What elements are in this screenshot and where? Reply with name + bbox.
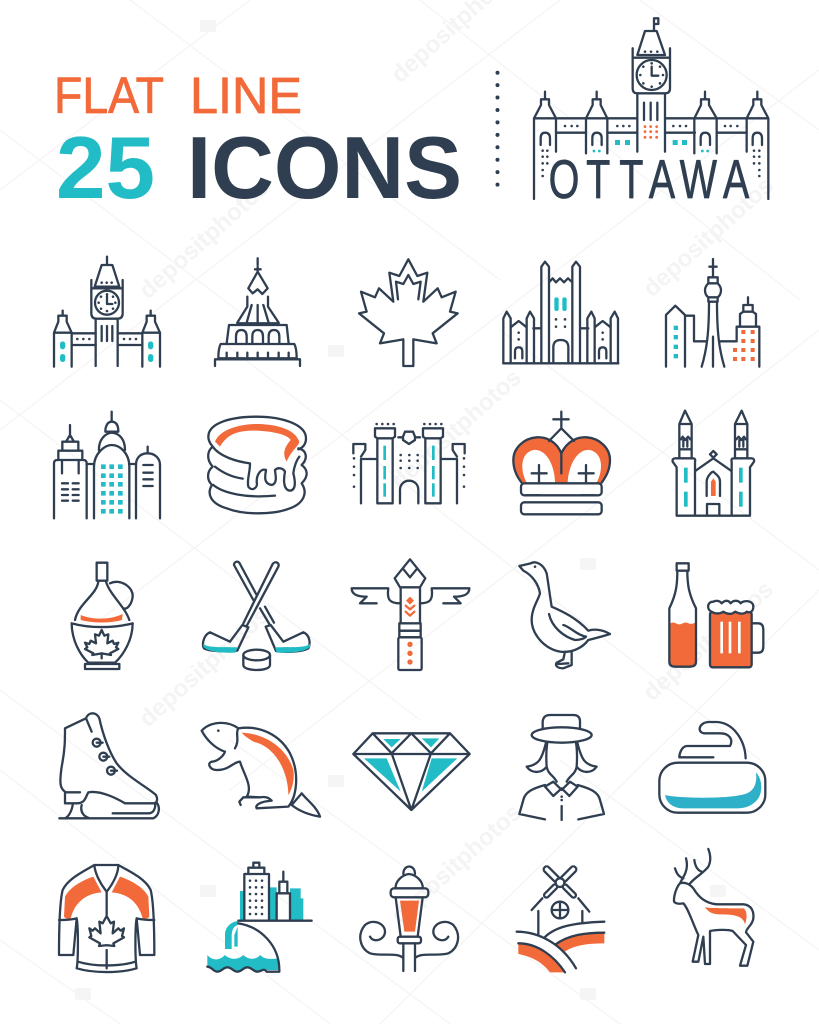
title: 25: 25 (56, 118, 155, 217)
icon: city skyline with dome (54, 412, 160, 518)
icon: royal crown (513, 412, 610, 514)
icon: waterfall and city (207, 863, 312, 972)
icon: CN tower skyline (666, 259, 759, 367)
icon: goose (519, 562, 610, 668)
watermark background: depositphotos (386, 799, 527, 929)
icon: Ottawa parliament header illustration (534, 18, 768, 211)
icon: dome building (215, 258, 300, 366)
watermark background: depositphotos (638, 576, 779, 706)
OTTAWA label: OTTAWA (549, 150, 749, 211)
watermark background: depositphotos (134, 602, 275, 732)
title: FLAT LINE: FLAT (54, 67, 164, 124)
icon: maple syrup jug (72, 563, 133, 669)
icon: diamond (353, 733, 470, 810)
watermark background: depositphotos (134, 174, 275, 304)
icon: ice skate (59, 713, 159, 818)
icon: maple leaf (359, 259, 458, 366)
icon: crossed hockey sticks and puck (203, 562, 310, 670)
icon: clock tower parliament (54, 257, 160, 367)
icon: hockey jersey (59, 865, 154, 972)
icon: beer bottle and mug (669, 563, 763, 667)
title: FLAT LINE: LINE (190, 67, 302, 124)
dotted divider (496, 73, 500, 197)
watermark background: depositphotos (638, 172, 779, 302)
icon: woman with hat (519, 715, 604, 820)
icon: gothic church towers (503, 262, 618, 363)
icon: deer (674, 849, 753, 966)
watermark background: depositphotos (386, 364, 527, 494)
title: ICONS: ICONS (187, 118, 462, 217)
icon: totem pole (352, 559, 469, 670)
icon: twin tower cathedral (673, 411, 754, 516)
icon: pancakes with syrup (208, 417, 307, 513)
icon: castle (353, 424, 465, 503)
icon: curling stone (659, 722, 765, 813)
icon: windmill and hills (517, 865, 604, 972)
icon: beaver (202, 723, 320, 817)
icon: street lamp (360, 866, 458, 971)
